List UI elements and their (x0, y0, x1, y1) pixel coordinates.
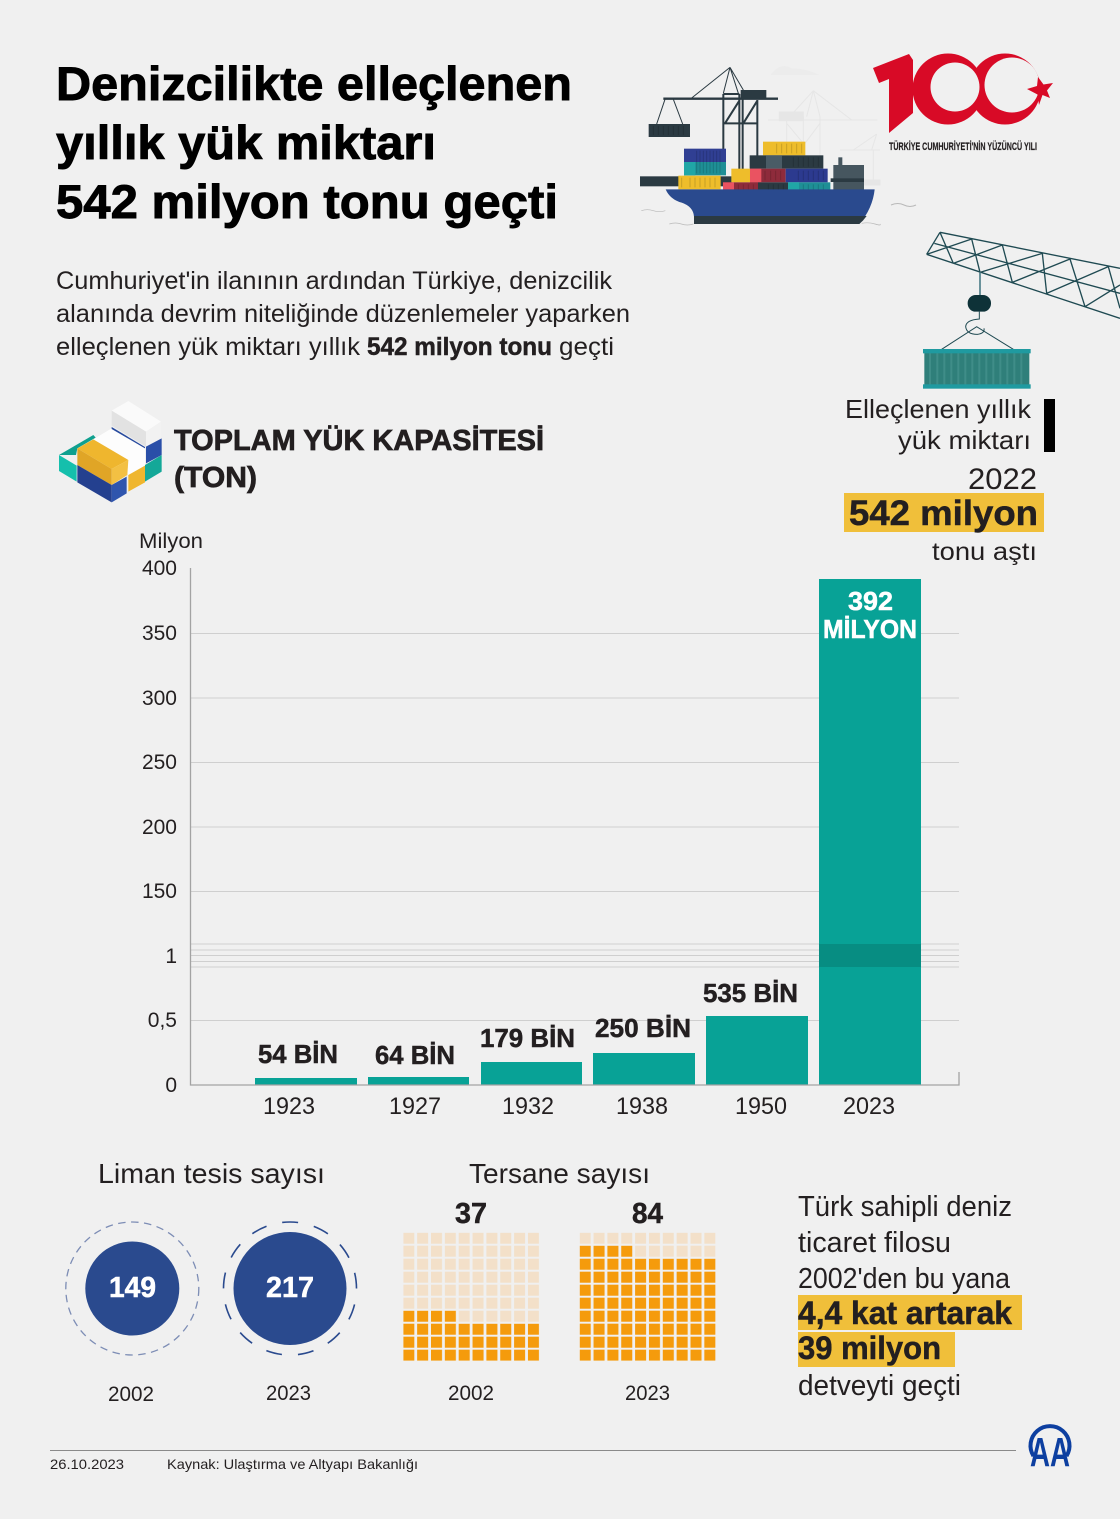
panel: merchant fleet (798, 1191, 1022, 1402)
section heading: TOPLAM YÜK KAPASİTESİ (174, 424, 544, 457)
value labels: 392 (848, 586, 893, 616)
y axis labels: Milyon (139, 530, 203, 553)
x axis labels: 1932 (502, 1093, 554, 1120)
value labels: 54 BİN (258, 1039, 338, 1069)
panel: merchant fleet: 4,4 kat artarak (798, 1295, 1012, 1331)
y axis labels: 300 (142, 687, 177, 710)
section heading (174, 424, 544, 494)
callout: annual handled cargo: yük miktarı (898, 425, 1031, 455)
icon: stacked containers (59, 401, 162, 502)
panel: merchant fleet: 2002'den bu yana (798, 1263, 1011, 1295)
panel: port facilities: 2023 (266, 1382, 311, 1405)
callout: annual handled cargo: Elleçlenen yıllık (845, 394, 1032, 424)
callout: annual handled cargo: 2022 (968, 463, 1037, 496)
y axis labels: 250 (142, 751, 177, 774)
panel: port facilities: Liman tesis sayısı (98, 1158, 325, 1189)
y axis labels (139, 530, 203, 1097)
panel: shipyards: 2023 (625, 1382, 670, 1405)
value labels: 535 BİN (703, 978, 798, 1008)
illustration: container ship and cranes (640, 66, 880, 225)
logo: AA: AA (1030, 1429, 1070, 1475)
panel: shipyards: 37 (455, 1198, 487, 1230)
section heading: (TON) (174, 462, 257, 494)
axes (190, 568, 959, 1085)
intro text: 542 milyon tonu (367, 333, 552, 361)
intro text: Cumhuriyet'in ilanının ardından Türkiye, denizcilik (56, 267, 612, 295)
title: yıllık yük miktarı (56, 116, 436, 169)
panel: shipyards: 84 (632, 1198, 663, 1230)
container ribs (653, 126, 823, 194)
logo: AA (1030, 1426, 1070, 1475)
y axis labels: 400 (142, 557, 177, 580)
intro text (56, 267, 630, 361)
panel: port facilities: 217 (266, 1272, 314, 1304)
containers (653, 126, 864, 196)
y axis labels: 150 (142, 880, 177, 903)
intro text: geçti (559, 333, 614, 361)
value labels: 250 BİN (595, 1013, 691, 1043)
callout: annual handled cargo: tonu aştı (932, 538, 1037, 566)
title (56, 57, 572, 228)
panel: merchant fleet: 39 milyon (798, 1330, 941, 1366)
footer: Kaynak: Ulaştırma ve Altyapı Bakanlığı (167, 1456, 418, 1472)
title: 542 milyon tonu geçti (56, 175, 558, 228)
panel: port facilities: 149 (109, 1272, 156, 1304)
value labels: 64 BİN (375, 1040, 455, 1070)
y axis labels: 200 (142, 816, 177, 839)
bar chart (139, 530, 959, 1120)
value labels: 179 BİN (480, 1023, 575, 1053)
bars (255, 579, 921, 1085)
panel: shipyards: Tersane sayısı (469, 1158, 650, 1189)
truss (927, 232, 1120, 318)
value labels: MİLYON (823, 614, 917, 644)
panel: port facilities (66, 1158, 357, 1406)
x axis labels: 1927 (389, 1093, 441, 1120)
waffle chart 2002 (403, 1233, 539, 1361)
water waves (641, 210, 880, 225)
callout: annual handled cargo (844, 394, 1055, 566)
background cranes (768, 66, 880, 185)
y axis labels: 350 (142, 622, 177, 645)
panel: merchant fleet: ticaret filosu (798, 1227, 951, 1259)
title: Denizcilikte elleçlenen (56, 57, 572, 110)
panel: shipyards (403, 1158, 716, 1405)
y axis labels: 0,5 (148, 1009, 177, 1032)
hull (666, 189, 875, 224)
waffle chart 2023 (580, 1233, 716, 1361)
grid lines (190, 634, 959, 1020)
panel: merchant fleet: detveyti geçti (798, 1370, 961, 1402)
panel: port facilities: 2002 (108, 1383, 154, 1406)
x axis labels: 1923 (263, 1093, 315, 1120)
intro text: alanında devrim niteliğinde düzenlemeler yaparken (56, 300, 630, 328)
x axis labels: 2023 (843, 1093, 895, 1120)
panel: merchant fleet: Türk sahipli deniz (798, 1191, 1012, 1223)
icon: crane with hanging container (923, 232, 1120, 389)
footer (50, 1450, 1016, 1472)
logo: 100th anniversary: TÜRKİYE CUMHURİYETİ'NİN YÜZÜNCÜ YILI (889, 140, 1037, 153)
wave right (891, 204, 916, 206)
x axis labels: 1950 (735, 1093, 787, 1120)
y axis labels: 0 (165, 1074, 177, 1097)
footer: 26.10.2023 (50, 1456, 124, 1472)
callout: annual handled cargo: 542 milyon (849, 494, 1038, 533)
value labels (258, 586, 917, 1070)
foreground crane (640, 67, 778, 186)
x axis labels: 1938 (616, 1093, 668, 1120)
logo: 100th anniversary (873, 54, 1053, 153)
intro text: elleçlenen yük miktarı yıllık (56, 333, 361, 361)
y axis labels: 1 (165, 945, 177, 968)
x axis labels (263, 1093, 895, 1120)
panel: shipyards: 2002 (448, 1382, 494, 1405)
